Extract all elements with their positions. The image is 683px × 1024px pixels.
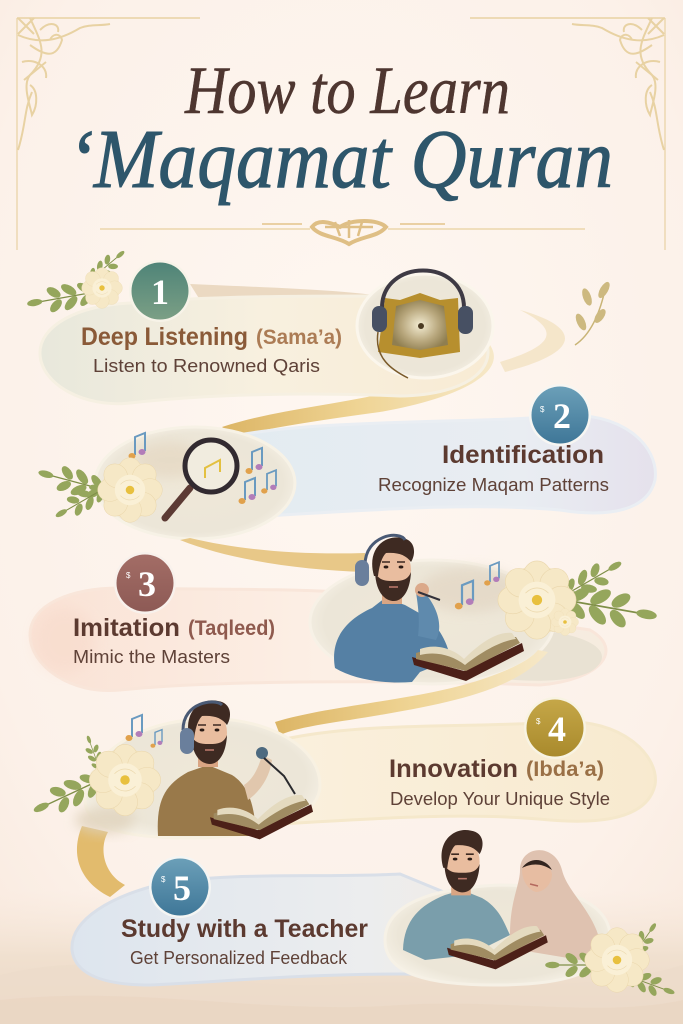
panel: step 3 imitation [30,535,660,691]
panel: step 1 deep listening [25,244,493,404]
icon: music notes [126,715,162,748]
number badge 4 [524,697,586,759]
subtitle 2: Recognize Maqam Patterns [378,474,609,495]
icon: book [378,293,460,358]
disc with man listening [310,535,660,684]
subtitle 5: Get Personalized Feedback [130,948,348,968]
icon: leaf sprig [574,280,612,345]
ribbon: between steps 3 and 4 [275,650,548,735]
icon: magnifying glass [165,440,237,518]
floral accent [25,244,131,319]
figure: student in hijab [510,850,602,960]
disc with magnifier and notes [34,427,295,539]
disc with teacher and student [385,830,679,1004]
icon: open book [210,795,313,839]
heading 3: Imitation [73,614,180,642]
heading 4: Innovation [389,755,518,783]
floral accent [498,550,660,639]
heading 5: Study with a Teacher [121,915,368,943]
floral accent [27,733,161,826]
ornamental frame [17,18,665,250]
icon: music notes [128,433,276,504]
panel 4 background [280,722,655,824]
ribbon: between steps 4 and 5 [77,826,125,897]
ribbon: between steps 2 and 3 [180,538,365,572]
panel 2 background [215,415,655,518]
panel 1 background [40,296,488,404]
corner flourish right [572,18,664,150]
number badge 5: 5 [173,868,191,908]
heading 1 translit: (Sama’a) [256,326,342,349]
number badge 2: $ [540,405,545,414]
corner flourish left [18,18,110,150]
number badge 2 [529,384,591,446]
title divider [100,220,585,244]
title [68,52,613,206]
number badge 1: 1 [151,272,169,312]
figure: man with headphones [334,535,450,682]
icon: open book [447,926,548,969]
floral accent [34,457,162,527]
number badge 4: $ [536,717,541,726]
number badge 5: $ [161,875,166,884]
icon: music notes [455,562,499,609]
subtitle 3: Mimic the Masters [73,646,230,667]
heading 4 translit: (Ibda’a) [526,758,604,781]
number badge 5 [149,856,211,918]
panel: step 2 identification [34,384,655,539]
number badge 3: 3 [138,564,156,604]
icon: headphones [372,270,473,378]
title line 2: ‘Maqamat Quran [68,113,613,206]
subtitle 4: Develop Your Unique Style [390,788,610,809]
number badge 1 [129,260,191,322]
icon: open book [412,633,524,681]
floral accent [545,918,679,1004]
heading 1: Deep Listening [81,323,248,351]
number badge 2: 2 [553,396,571,436]
panel: step 4 innovation [27,697,655,839]
title line 1: How to Learn [184,52,510,128]
number badge 4: 4 [548,709,566,749]
panel 5 background [72,874,560,985]
figure: man with microphone [158,700,295,836]
disc with headphones and book [357,270,493,378]
number badge 3 [114,552,176,614]
disc with man singing [27,700,320,839]
panel 3 background [30,588,606,691]
ribbon: sweep behind step 1 [190,284,565,436]
subtitle 1: Listen to Renowned Qaris [93,355,320,376]
heading 3 translit: (Taqleed) [188,617,275,640]
figure: teacher [403,830,510,960]
number badge 3: $ [126,571,131,580]
heading 2: Identification [442,441,604,469]
panel: step 5 study with a teacher [72,830,679,1004]
